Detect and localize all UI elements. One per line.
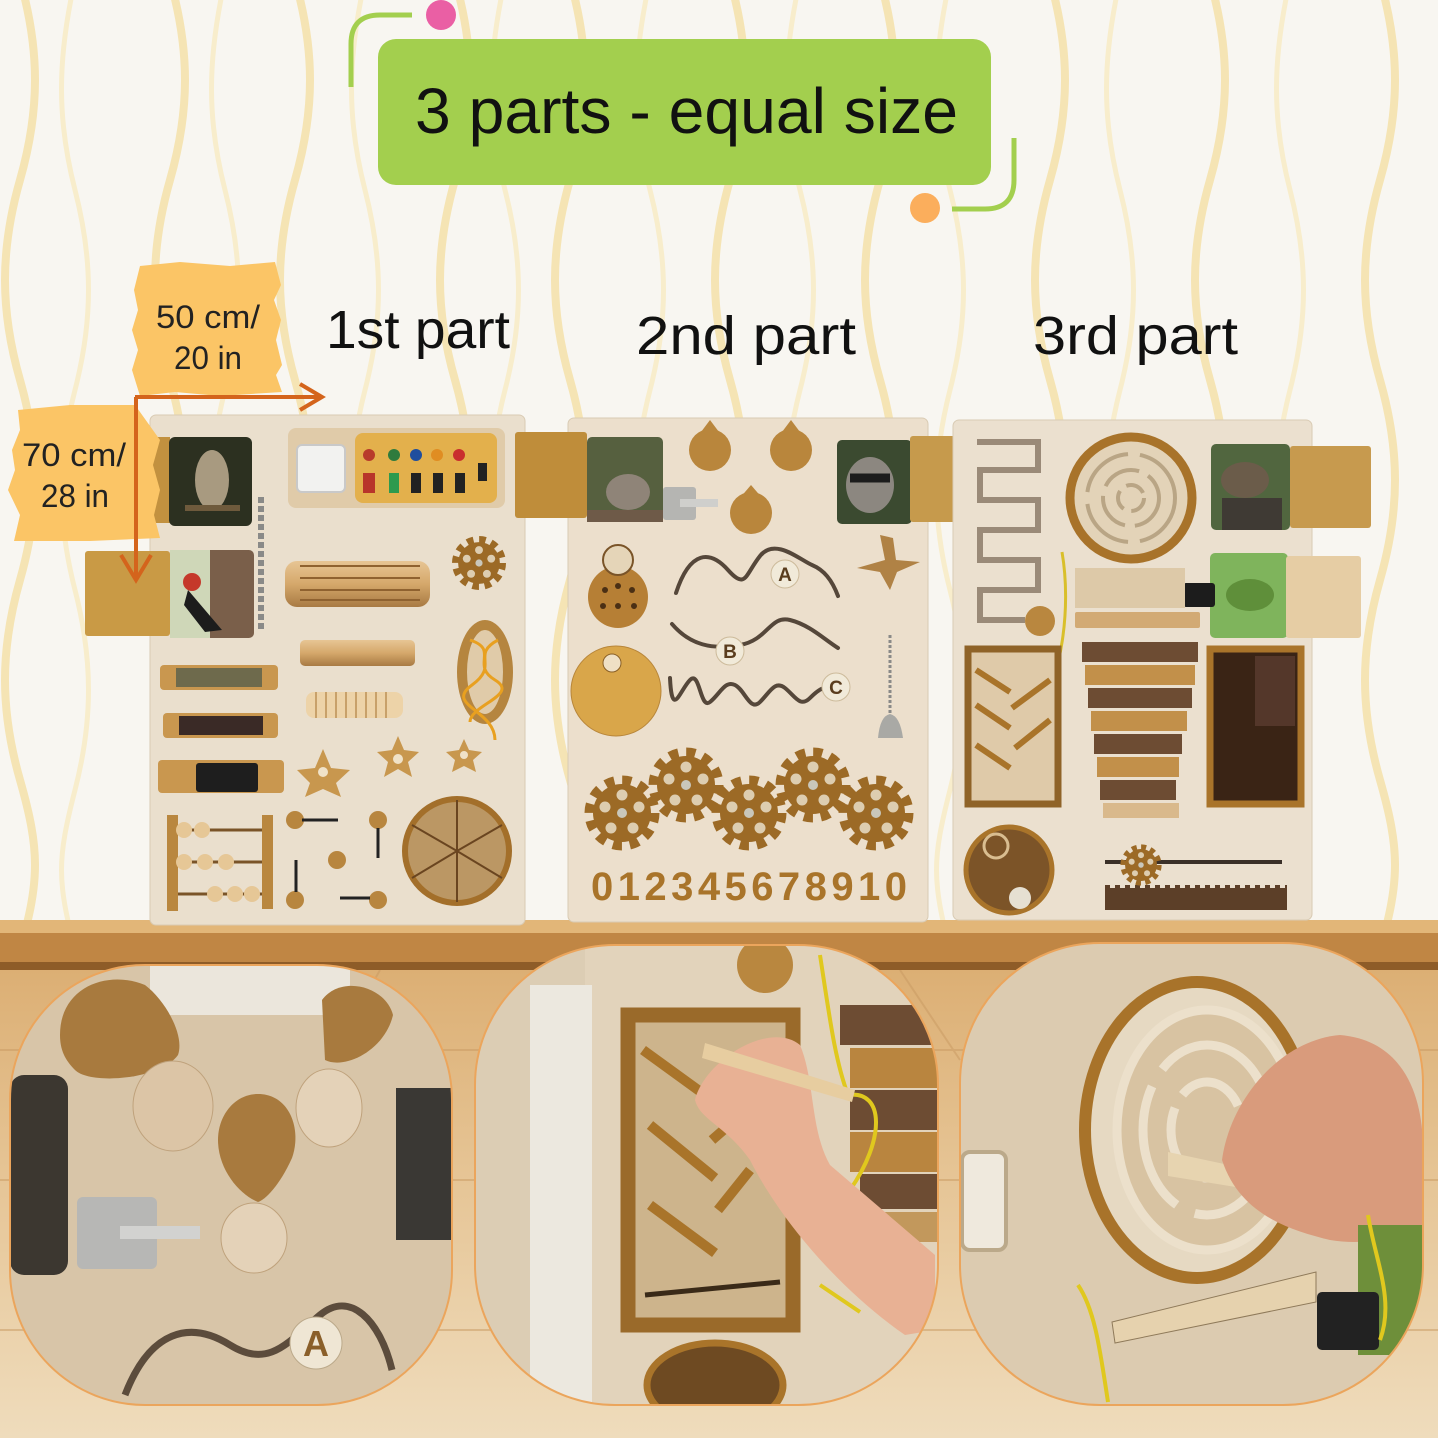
stars	[297, 736, 482, 797]
buckle	[158, 760, 284, 793]
gears row	[590, 753, 908, 845]
arm and hand with stylus	[695, 1037, 935, 1335]
arrow: width	[135, 384, 322, 410]
snake slot	[977, 442, 1038, 620]
metal latch	[77, 1197, 200, 1269]
wooden slats	[840, 1005, 938, 1242]
cube roller	[300, 640, 415, 666]
photo bubble 1: covers and animal stencils	[10, 965, 452, 1405]
arrow: height	[121, 397, 151, 580]
wooden slats	[1082, 642, 1198, 818]
wooden cover top-right	[322, 986, 393, 1063]
chain	[258, 497, 264, 630]
photo bubble 1: covers and animal stencils: A	[303, 1323, 329, 1364]
door right	[910, 436, 962, 522]
round maze	[1070, 437, 1192, 559]
black lock	[1317, 1292, 1379, 1350]
heading: 3rd part: 3rd part	[1033, 306, 1238, 366]
wooden cover centre	[218, 1094, 295, 1202]
rack and gear	[1105, 847, 1287, 910]
stencil duck	[133, 1061, 213, 1151]
heading: 2nd part: 2nd part	[636, 306, 856, 366]
size label: 70 cm / 28 in: 28 in	[41, 478, 109, 514]
bell	[878, 635, 903, 738]
round window	[644, 1340, 786, 1404]
mustard disk	[571, 646, 661, 736]
light panel	[288, 428, 505, 508]
photo: raccoon	[837, 440, 912, 524]
yellow cord	[820, 955, 876, 1312]
photo: owl	[169, 437, 252, 526]
size label: 50 cm / 20 in: 20 in	[174, 340, 242, 376]
photo: squirrel	[587, 437, 663, 522]
board: 2nd part	[515, 418, 962, 922]
board: 1st part	[85, 415, 525, 925]
bead B	[716, 637, 744, 665]
size label: 50 cm / 20 in	[132, 262, 282, 396]
frog photo fragment	[1358, 1225, 1423, 1355]
board panel	[150, 415, 525, 925]
photo: hedgehog	[1211, 444, 1290, 530]
photo bubble 3: round maze activity	[960, 943, 1423, 1405]
ramp frame	[628, 1015, 793, 1325]
board: 3rd part	[953, 420, 1371, 920]
board panel	[568, 418, 928, 922]
door: hedgehog	[1290, 446, 1371, 528]
pear shaped covers	[689, 420, 812, 534]
bead B: B	[723, 642, 737, 663]
black lock	[1183, 583, 1215, 607]
size label: 50 cm / 20 in: 50 cm/	[156, 299, 260, 335]
round maze	[1085, 982, 1309, 1278]
raccoon photo fragment	[396, 1088, 452, 1240]
floor and skirting board	[0, 920, 1438, 1438]
size label: 70 cm / 28 in	[8, 405, 160, 541]
photo bubble 2: stylus ramp activity	[475, 937, 938, 1427]
slider with peg	[1025, 552, 1200, 705]
slot	[1112, 1272, 1316, 1343]
ladybug	[588, 545, 648, 628]
straps	[160, 665, 278, 738]
wall background with wavy stripes	[0, 0, 1438, 950]
heading: 1st part: 1st part	[326, 300, 510, 360]
bead C	[822, 673, 850, 701]
door left	[515, 432, 587, 518]
title box	[378, 39, 991, 185]
track and bead	[125, 1306, 392, 1395]
ridged roller	[306, 692, 403, 718]
small gear	[456, 540, 502, 586]
latch	[663, 487, 718, 520]
numbers 0-10: 012345678910	[591, 865, 907, 909]
barred roller	[285, 561, 430, 607]
wooden cover top-left	[60, 979, 179, 1078]
round puzzle	[405, 799, 509, 903]
bead A: A	[778, 565, 792, 586]
hand with stylus	[1168, 1035, 1423, 1242]
abacus	[167, 815, 273, 911]
stencil bird	[296, 1069, 362, 1147]
bead A	[771, 560, 799, 588]
title text: 3 parts - equal size	[415, 75, 958, 147]
door: frog	[1286, 556, 1361, 638]
numbered pins	[286, 811, 387, 909]
bead C: C	[829, 678, 843, 699]
stencil rabbit	[221, 1203, 287, 1273]
yellow cord	[1078, 1215, 1385, 1402]
board panel	[953, 420, 1312, 920]
squirrel photo fragment	[10, 1075, 68, 1275]
ramp frame	[968, 649, 1058, 804]
title decoration bottom-right	[910, 138, 1014, 223]
photo and door: woodpecker	[85, 550, 254, 638]
slot cut-out	[962, 1152, 1006, 1250]
round peg	[737, 946, 793, 993]
propeller	[857, 535, 920, 590]
shoe lacing	[457, 620, 513, 740]
title banner	[351, 0, 1014, 223]
photo: frog	[1210, 553, 1288, 638]
dark frame	[1210, 649, 1301, 804]
size label: 70 cm / 28 in: 70 cm/	[22, 437, 126, 473]
title decoration top-left	[351, 0, 456, 87]
round star window	[966, 827, 1052, 913]
wavy bead tracks	[670, 549, 838, 705]
door behind owl	[138, 437, 170, 523]
